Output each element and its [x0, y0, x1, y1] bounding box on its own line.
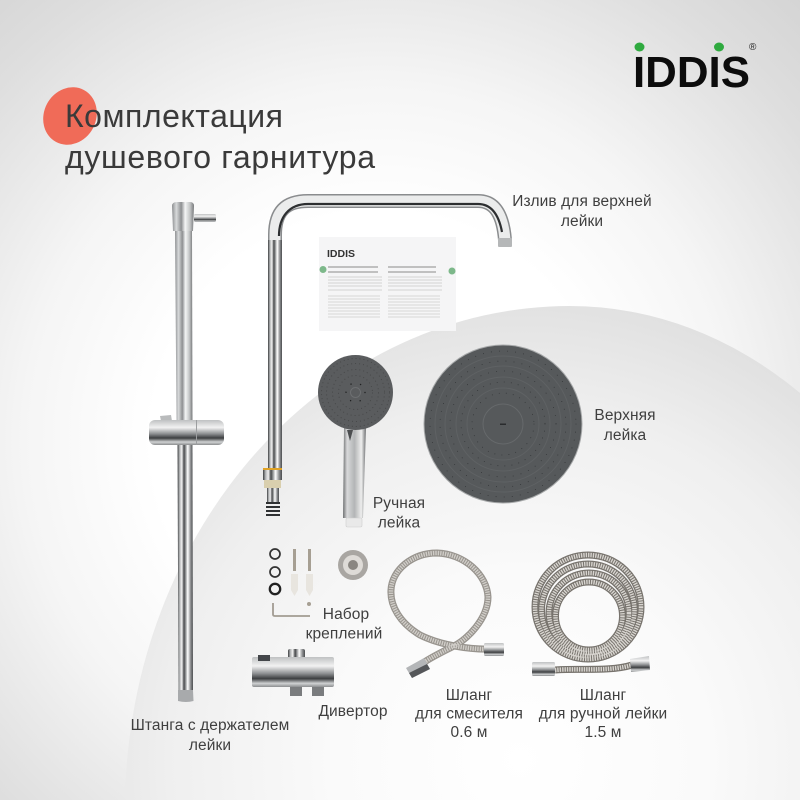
title: Комплектация [65, 98, 283, 134]
label: slide bar: лейки [189, 737, 231, 754]
title [33, 78, 375, 175]
label: hose for hand shower: Шланг [580, 687, 626, 704]
label: mounting kit: Набор [323, 606, 369, 623]
label: diverter: Дивертор [318, 703, 388, 720]
logo: IDDIS: IDDIS [633, 48, 750, 97]
product: mounting kit [270, 549, 368, 616]
product: instruction sheet: IDDIS [327, 248, 355, 260]
label: spout: лейки [561, 213, 603, 230]
label: hose for mixer: Шланг [446, 687, 492, 704]
label: spout: Излив для верхней [512, 193, 652, 210]
product: rain shower head [424, 344, 582, 504]
product: shower arm [263, 201, 512, 515]
label: mounting kit: креплений [306, 626, 382, 642]
title accent blob [33, 78, 107, 154]
label: rain shower head: Верхняя [594, 407, 656, 424]
product: hand shower [318, 355, 393, 527]
label: hose for hand shower: 1.5 м [584, 724, 622, 741]
label: hand shower: Ручная [373, 495, 425, 512]
product: slide bar with holder [149, 202, 224, 702]
label: hose for hand shower: для ручной лейки [539, 706, 667, 722]
label: slide bar: Штанга с держателем [131, 717, 289, 734]
product: diverter [252, 649, 334, 696]
label: rain shower head: лейка [604, 427, 647, 444]
product: hose 0.6 m [391, 553, 504, 678]
logo: IDDIS: ® [749, 42, 757, 53]
label: hose for mixer: для смесителя [415, 706, 523, 722]
label: hose for mixer: 0.6 м [450, 724, 488, 741]
label: hand shower: лейка [378, 514, 421, 532]
product: hose 1.5 m [532, 555, 650, 676]
product: instruction sheet [319, 237, 456, 331]
title: душевого гарнитура [65, 139, 375, 175]
